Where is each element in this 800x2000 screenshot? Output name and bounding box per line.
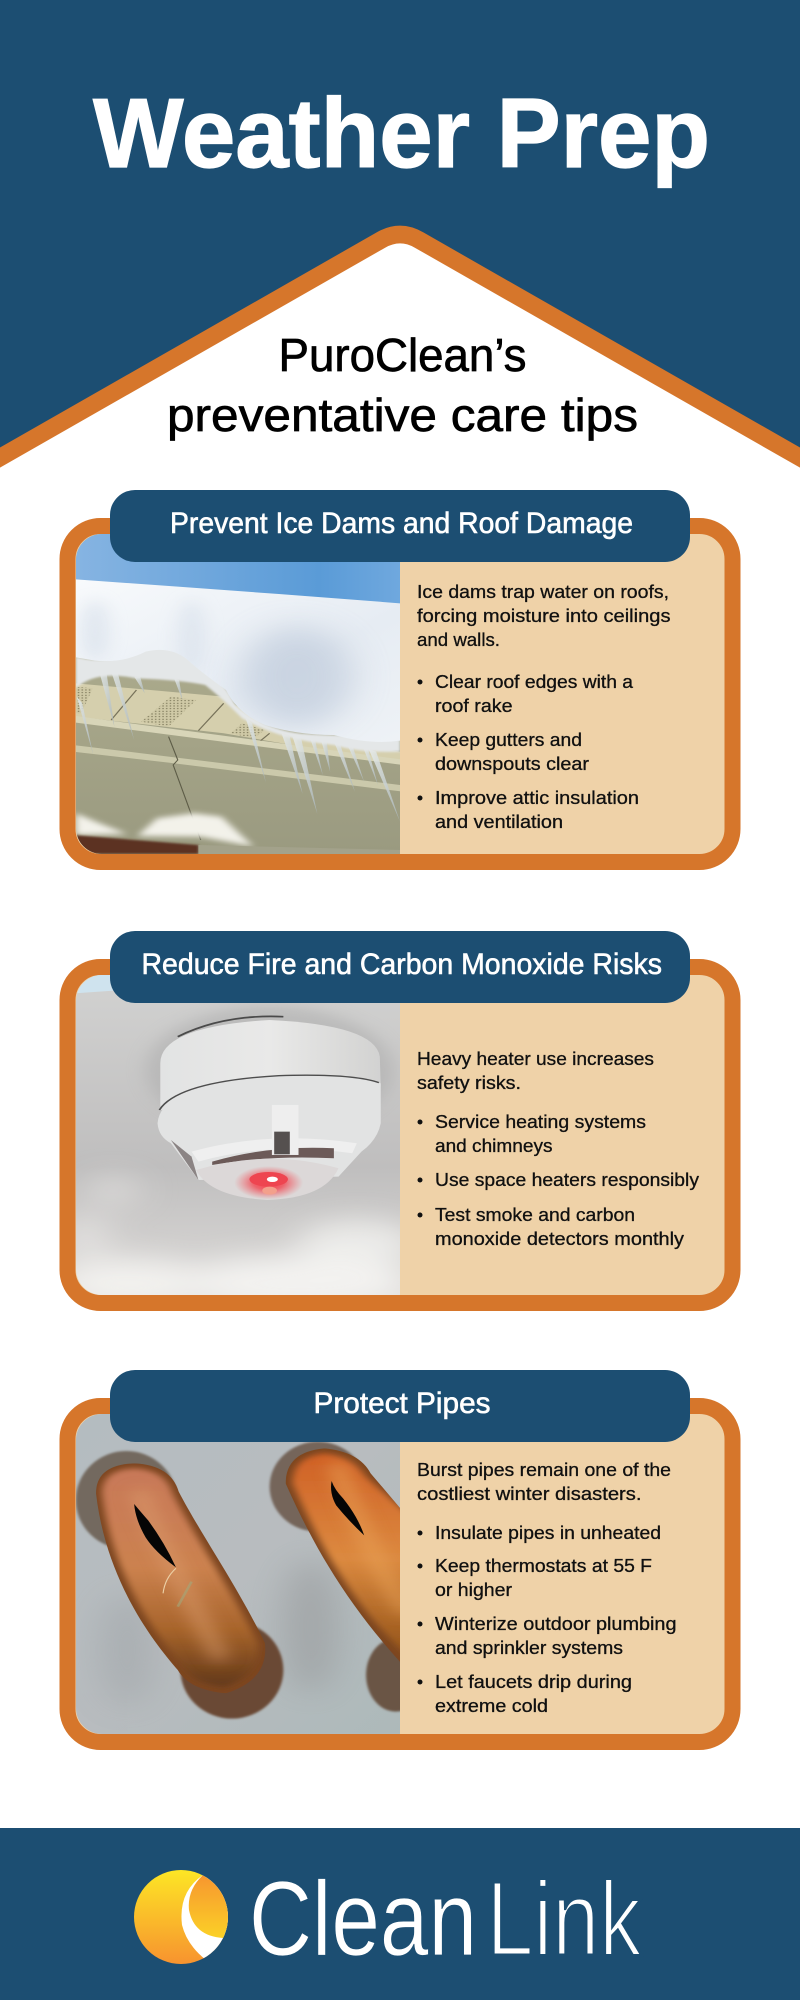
crack <box>134 1504 176 1567</box>
wordmark: Link <box>486 1860 642 1978</box>
bullet list: and sprinkler systems <box>435 1637 623 1658</box>
bullet list: Keep thermostats at 55 F <box>435 1555 652 1576</box>
bullet list: Keep gutters and <box>435 729 582 750</box>
intro text: Ice dams trap water on roofs, <box>417 581 669 602</box>
header pill <box>110 490 690 562</box>
photo: smoke detector <box>76 975 400 1295</box>
header pill <box>110 1370 690 1442</box>
bullet list <box>418 1111 700 1249</box>
card frame <box>68 1406 732 1742</box>
header pill <box>110 931 690 1003</box>
photo: snowy roof with icicles <box>76 534 400 854</box>
photo: burst copper pipes <box>76 1414 426 1734</box>
bullet list: Clear roof edges with a <box>435 671 634 692</box>
bullet list: Let faucets drip during <box>435 1671 632 1692</box>
bullet list: Insulate pipes in unheated <box>435 1522 661 1543</box>
header pill: Reduce Fire and Carbon Monoxide Risks <box>142 948 662 981</box>
intro text <box>417 1459 671 1504</box>
bullet list <box>418 671 639 832</box>
footer band <box>0 1828 800 2000</box>
bullet list: roof rake <box>435 695 512 716</box>
bullet list: Use space heaters responsibly <box>435 1169 700 1190</box>
wordmark: Clean <box>249 1860 477 1978</box>
header pill: Protect Pipes <box>314 1387 490 1420</box>
intro text: Burst pipes remain one of the <box>417 1459 671 1480</box>
bullet list: and chimneys <box>435 1135 552 1156</box>
card frame <box>68 526 732 862</box>
bullet list: Test smoke and carbon <box>435 1204 635 1225</box>
header pill: Prevent Ice Dams and Roof Damage <box>170 507 633 540</box>
icon: CleanLink moon logo <box>134 1870 228 1964</box>
left pipe <box>96 1464 266 1693</box>
subtitle: preventative care tips <box>167 389 638 441</box>
bullet list: and ventilation <box>435 811 563 832</box>
smoke <box>76 1176 400 1295</box>
bullet list: Improve attic insulation <box>435 787 639 808</box>
panel: ice dams <box>68 490 732 862</box>
roof shape <box>0 234 800 480</box>
bullet list: extreme cold <box>435 1695 548 1716</box>
bullet list: downspouts clear <box>435 753 589 774</box>
bullet list <box>418 1522 676 1716</box>
intro text: Heavy heater use increases <box>417 1048 654 1069</box>
intro text <box>417 1048 654 1093</box>
intro text <box>417 581 670 650</box>
icicles <box>77 667 400 822</box>
card frame <box>68 967 732 1303</box>
right pipe <box>286 1448 400 1662</box>
bullet list: or higher <box>435 1579 512 1600</box>
panel: fire and carbon monoxide <box>54 931 732 1310</box>
intro text: and walls. <box>417 629 500 650</box>
intro text: costliest winter disasters. <box>417 1483 642 1504</box>
header background <box>0 0 800 480</box>
bullet list: monoxide detectors monthly <box>435 1228 685 1249</box>
panel: protect pipes <box>68 1370 732 1742</box>
intro text: safety risks. <box>417 1072 521 1093</box>
subtitle <box>167 329 638 441</box>
title: Weather Prep <box>93 78 710 188</box>
bullet list: Winterize outdoor plumbing <box>435 1613 676 1634</box>
subtitle: PuroClean’s <box>278 329 526 381</box>
bullet list: Service heating systems <box>435 1111 646 1132</box>
intro text: forcing moisture into ceilings <box>417 605 670 626</box>
